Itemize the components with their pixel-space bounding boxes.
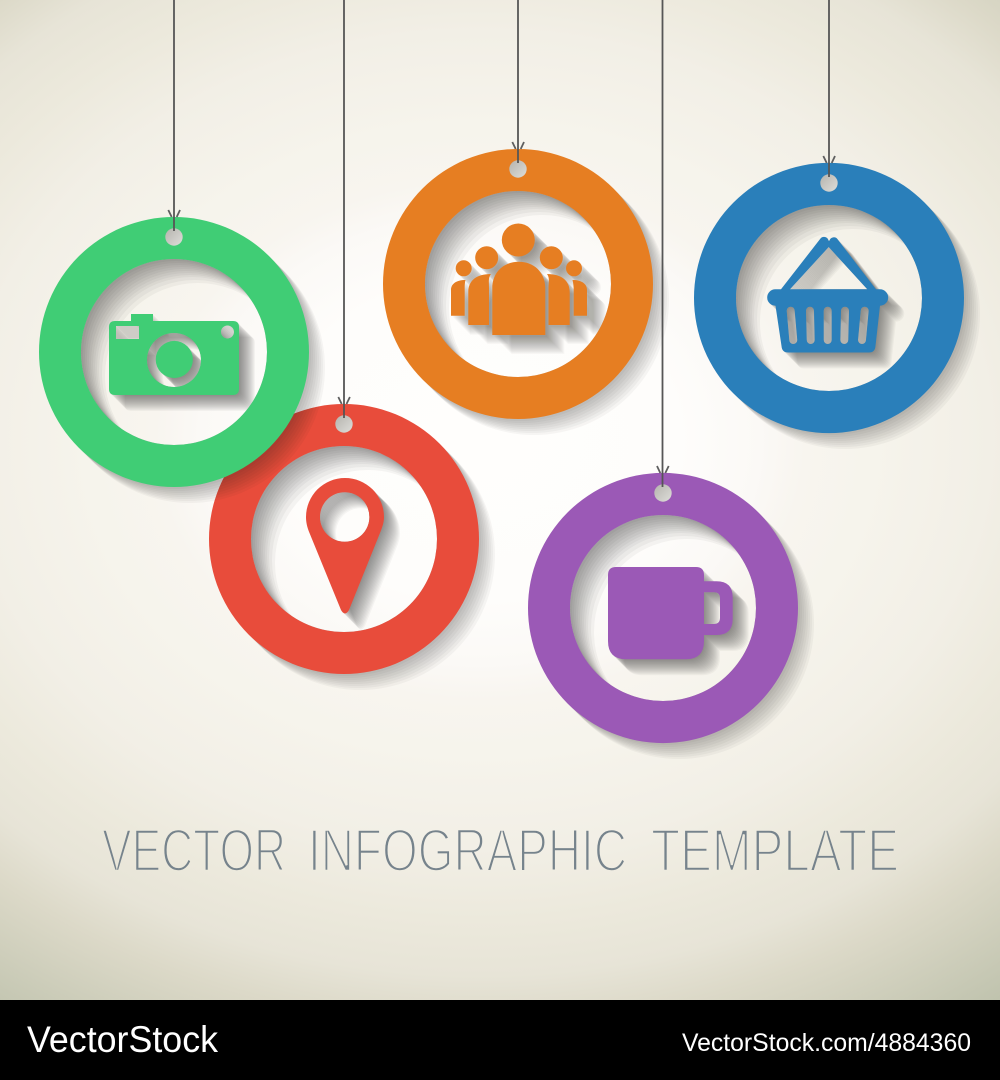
icon shadow: mug [614,570,748,675]
icon: camera [109,314,239,395]
icon shadow: location pin [320,491,400,629]
outer shadow: purple ring [530,475,814,759]
icon shadow: basket [771,240,904,368]
hole background: purple ring [570,515,756,701]
hole background: red ring [251,446,437,632]
hanging hole [820,174,838,192]
hanging hole [335,415,353,433]
panel: orange people ring [383,0,675,441]
inner shadow: blue ring [736,205,904,374]
title: VECTOR [102,817,286,884]
title [102,817,899,884]
hanging string [657,0,669,487]
outer shadow: red ring [211,406,495,690]
title: TEMPLATE [651,817,899,884]
inner shadow: orange ring [425,191,594,360]
title: INFOGRAPHIC [308,817,627,884]
panel: green camera ring [39,0,325,503]
inner shadow: red ring [251,446,420,614]
outer shadow: orange ring [385,151,669,435]
blue ring [694,163,964,433]
green ring [39,217,309,487]
inner shadow: green ring [81,259,250,428]
purple ring [528,473,798,743]
hole background: green ring [81,259,267,445]
orange ring [383,149,653,419]
panel: purple mug ring [528,0,814,759]
hole background: blue ring [736,205,922,391]
icon: shopping basket [767,237,888,352]
panel: red location ring [209,0,495,690]
icon: mug [608,567,733,659]
outer shadow: green ring [41,219,325,503]
hanging string [168,0,180,231]
inner shadow: purple ring [570,515,738,684]
watermark bar [0,1000,1000,1080]
red ring [209,404,479,674]
watermark image id: VectorStock.com/4884360 [682,1029,971,1057]
icon shadow: people [451,224,587,335]
hole background: orange ring [425,191,611,377]
hanging string [512,0,524,163]
icon: group of people [451,224,587,335]
hanging hole [654,484,672,502]
hanging string [823,0,835,177]
icon shadow: camera [112,315,255,411]
icon: location pin [306,478,384,614]
panel: blue basket ring [694,0,980,449]
hanging hole [165,228,183,246]
hanging string [338,0,350,418]
hanging hole [509,160,527,178]
outer shadow: blue ring [696,165,980,449]
watermark logo text: VectorStock [27,1019,218,1060]
